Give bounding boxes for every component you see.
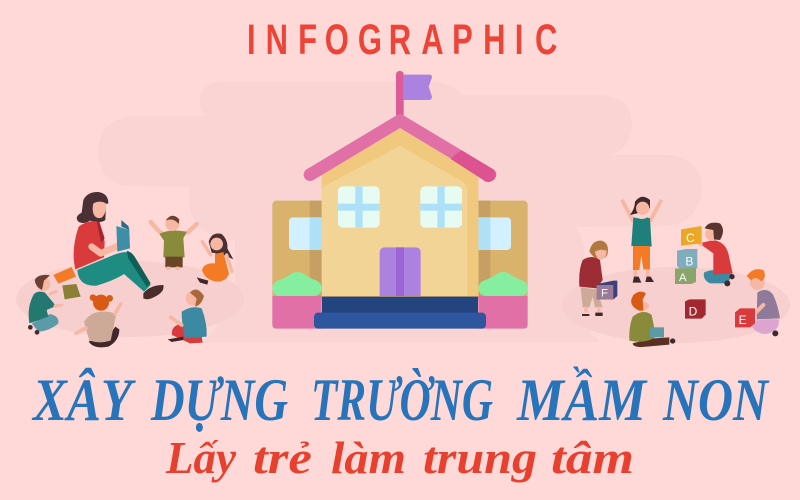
block C [681,226,702,246]
subheading: tâm [551,432,634,483]
block E: E [739,313,747,327]
block D: D [689,304,698,318]
main heading [31,367,770,433]
ground shadow: left group [16,261,244,337]
title: infographic: INFOGRAPHIC [247,15,557,63]
planters [272,272,528,329]
main heading: XÂY [31,367,137,433]
girl with block F [579,241,608,316]
block E [735,308,755,327]
block B [677,249,697,268]
block A [675,268,696,284]
ground shadow: right group [562,267,790,343]
books on floor [53,267,81,299]
steps [314,297,486,329]
girl in orange dress [197,234,233,285]
block D [685,299,706,319]
block C: C [686,231,695,245]
roof [310,121,496,182]
school building [272,71,528,329]
subheading: trẻ [253,432,312,483]
background clouds [98,82,702,342]
block A: A [679,272,687,284]
boy in teal [28,275,62,335]
block F: F [601,288,608,300]
main heading: DỰNG [150,367,288,433]
side wings [272,201,528,301]
boy in blue [168,290,207,343]
main heading: NON [662,367,770,433]
main heading: MẦM [516,367,648,433]
subheading: trung [423,432,537,483]
subheading: làm [331,432,406,483]
flag [396,71,432,118]
teacher [74,192,164,299]
boy with arms up [151,216,197,270]
right scene: children with alphabet blocks [579,197,780,347]
girl with orange bun [76,294,121,347]
main house [322,128,478,296]
windows [338,186,462,228]
subheading: Lấy [165,432,237,483]
main heading: TRƯỜNG [311,367,493,433]
boy stacking blocks [695,223,735,286]
left scene: teacher reading to children [28,192,233,347]
girl standing [623,197,661,283]
door [380,247,421,296]
subheading [165,432,634,483]
block B: B [685,254,693,268]
boy with block E [747,269,780,336]
block F [597,281,617,300]
boy sitting in olive [629,292,675,347]
